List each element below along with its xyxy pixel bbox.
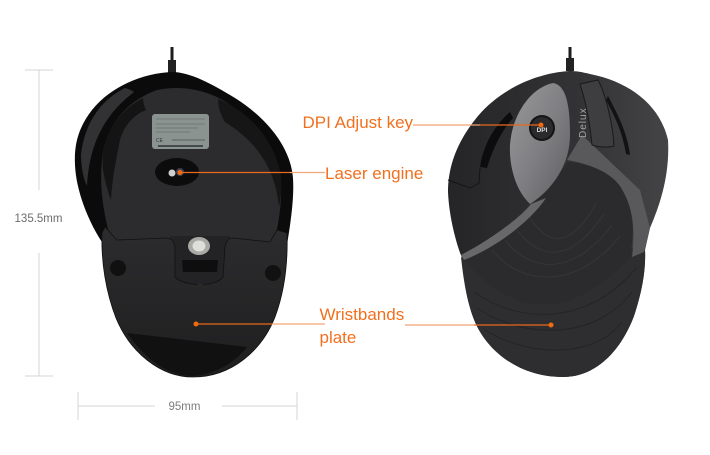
label: Laser engine: Laser engine bbox=[325, 164, 423, 183]
DPI button bbox=[529, 115, 555, 141]
left recess bbox=[103, 98, 146, 200]
palm rest bbox=[462, 162, 633, 304]
laser engine window bbox=[155, 158, 199, 186]
mouse top bbox=[448, 47, 668, 377]
width dimension: 95mm: 95mm bbox=[169, 401, 200, 413]
ridges on palm rest bbox=[492, 204, 620, 277]
width dimension: 95mm bbox=[78, 392, 297, 420]
height dimension: 135.5mm: 135.5mm bbox=[15, 213, 62, 225]
hinge latch bbox=[182, 260, 218, 272]
cable bbox=[568, 47, 572, 76]
silver button panel bbox=[510, 83, 570, 204]
label: Wristbands plate: Wristbands bbox=[320, 305, 404, 324]
wrist plate bbox=[461, 236, 645, 377]
silhouette bbox=[448, 71, 668, 377]
DPI button: DPI bbox=[537, 127, 548, 134]
hinge backing bbox=[170, 236, 230, 284]
left side button slot bbox=[480, 112, 513, 168]
label: Wristbands plate: plate bbox=[320, 328, 356, 347]
rating label: CE bbox=[156, 138, 164, 144]
brand name: Delux bbox=[578, 107, 589, 138]
upper shell bbox=[75, 72, 293, 245]
shell highlight bbox=[81, 88, 134, 186]
grey band bbox=[461, 198, 546, 260]
right recess bbox=[218, 99, 281, 207]
height dimension: 135.5mm bbox=[15, 70, 62, 376]
rating label bbox=[152, 114, 209, 149]
hinge stud bbox=[188, 237, 210, 255]
screw recesses bbox=[110, 260, 126, 276]
wrist pad bbox=[127, 333, 247, 376]
scroll button bbox=[580, 80, 614, 147]
right side slot bbox=[606, 96, 630, 155]
callout: DPI pointer bbox=[413, 122, 544, 128]
callout: wristbands left pointer bbox=[194, 322, 325, 326]
callout: laser engine pointer bbox=[178, 170, 325, 175]
textured base bbox=[101, 88, 281, 245]
wrist plate bbox=[102, 227, 287, 377]
cable bbox=[170, 47, 174, 78]
ridges on wrist plate bbox=[474, 268, 636, 350]
callout: wristbands right pointer bbox=[405, 322, 554, 328]
label: DPI Adjust key: DPI Adjust key bbox=[302, 113, 414, 132]
mouse underside bbox=[75, 47, 293, 377]
